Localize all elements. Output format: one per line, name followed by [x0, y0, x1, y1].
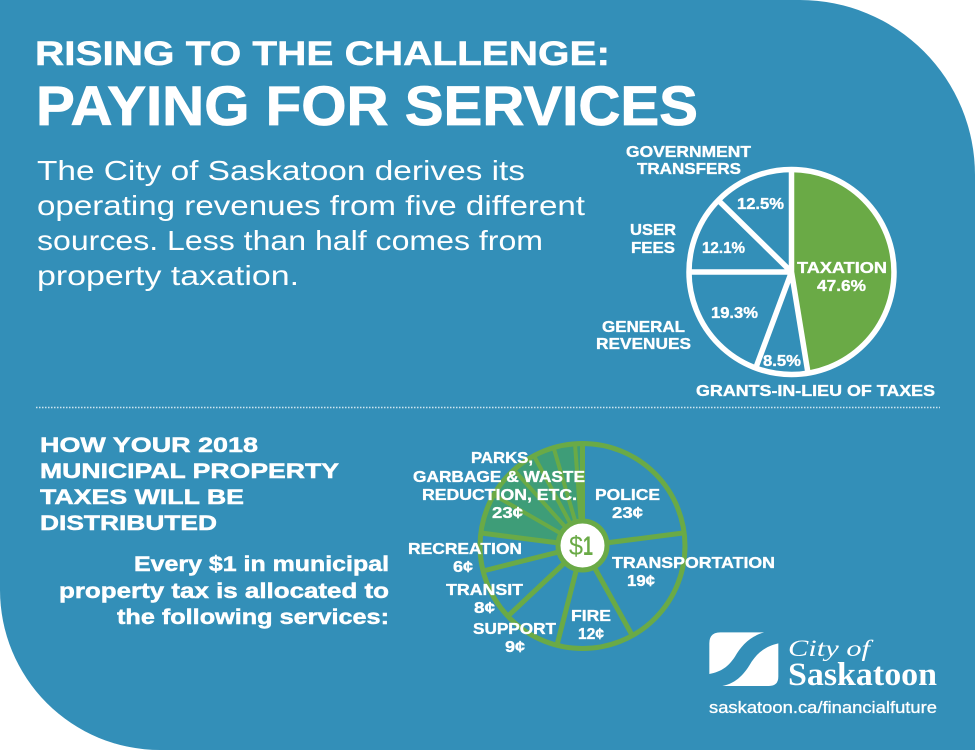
service labels: REDUCTION, ETC.	[422, 487, 577, 504]
revenue pie chart	[596, 144, 935, 400]
pie labels: GENERAL	[602, 319, 685, 336]
title: RISING TO THE CHALLENGE:	[35, 35, 610, 73]
service labels: 19¢	[627, 573, 655, 590]
intro text: The City of Saskatoon derives its	[37, 155, 525, 186]
allocation explanation: Every $1 in municipal	[134, 552, 389, 576]
pie slice: taxation	[791, 170, 894, 373]
service labels: 23¢	[492, 505, 523, 522]
intro text: property taxation.	[37, 260, 299, 291]
service labels: PARKS,	[471, 450, 533, 467]
intro text: sources. Less than half comes from	[37, 225, 543, 256]
dotted divider	[36, 406, 940, 408]
icon: logo mark	[709, 632, 778, 686]
pie outline and spokes	[480, 444, 685, 648]
pie labels: TRANSFERS	[637, 161, 741, 178]
City of Saskatoon logo	[709, 632, 937, 693]
allocation explanation: property tax is allocated to	[59, 579, 389, 603]
pie labels: FEES	[631, 240, 675, 257]
service labels	[408, 450, 775, 656]
pie labels: 8.5%	[763, 353, 801, 370]
pie labels: USER	[630, 222, 676, 239]
section heading: MUNICIPAL PROPERTY	[40, 459, 339, 483]
tax dollar pie chart	[408, 444, 775, 656]
center circle: $1: $	[569, 531, 583, 561]
service labels: POLICE	[595, 487, 660, 504]
service labels: 6¢	[453, 559, 473, 576]
intro text: operating revenues from five different	[37, 190, 585, 221]
center circle: $1: 1	[583, 531, 593, 561]
section heading: HOW YOUR 2018	[40, 433, 258, 457]
pie labels: 19.3%	[711, 305, 758, 322]
pie labels	[596, 144, 935, 400]
service labels: 23¢	[612, 505, 643, 522]
pie labels: 12.5%	[737, 196, 784, 213]
service labels: GARBAGE & WASTE	[413, 469, 585, 486]
pie labels: REVENUES	[596, 336, 691, 353]
service labels: TRANSIT	[446, 582, 523, 599]
section heading: DISTRIBUTED	[40, 511, 217, 535]
section heading: TAXES WILL BE	[40, 485, 244, 509]
service labels: SUPPORT	[473, 621, 556, 638]
pie labels: 12.1%	[702, 240, 745, 257]
pie labels: TAXATION	[797, 260, 887, 277]
allocation explanation	[59, 552, 389, 629]
allocation explanation: the following services:	[117, 605, 389, 629]
service labels: RECREATION	[408, 541, 522, 558]
website URL: saskatoon.ca/financialfuture	[709, 698, 937, 717]
service labels: 12¢	[578, 626, 604, 643]
title	[35, 35, 698, 137]
service labels: TRANSPORTATION	[612, 555, 775, 572]
City of Saskatoon logo: Saskatoon	[788, 657, 937, 693]
intro text	[37, 155, 585, 291]
title: PAYING FOR SERVICES	[36, 74, 698, 137]
pie labels: GRANTS-IN-LIEU OF TAXES	[696, 383, 935, 400]
service labels: FIRE	[571, 608, 611, 625]
City of Saskatoon logo: City of	[788, 636, 875, 661]
service labels: 9¢	[505, 639, 525, 656]
center circle: $1	[558, 521, 607, 570]
service labels: 8¢	[474, 600, 495, 617]
pie labels: GOVERNMENT	[626, 144, 751, 161]
pie labels: 47.6%	[817, 278, 866, 295]
dark wedge: parks, garbage, etc.	[481, 444, 582, 546]
section heading	[40, 433, 339, 535]
pie outline and dividers	[689, 170, 894, 374]
